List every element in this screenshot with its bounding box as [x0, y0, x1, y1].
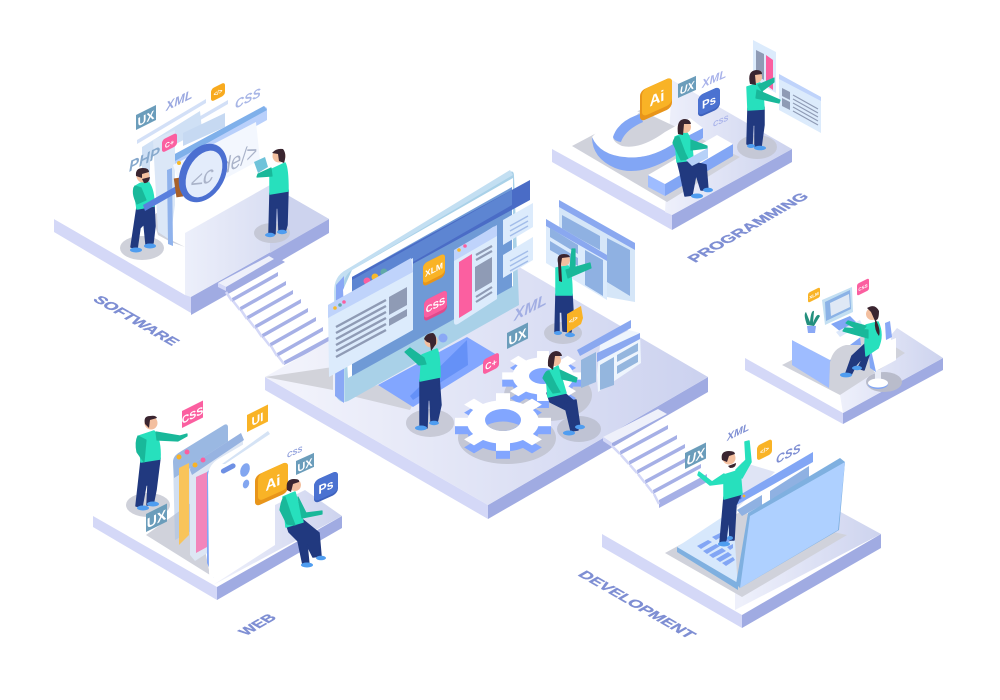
- tag: UX web: UX: [147, 508, 166, 532]
- tag: UX development: UX: [686, 445, 705, 469]
- tile: Ps web: [314, 470, 338, 504]
- text: code label: <code/>: [190, 137, 257, 197]
- tag: code orange software: </>: [214, 87, 223, 99]
- label: web: WEB: [236, 612, 281, 638]
- label: software: SOFTWARE: [89, 294, 182, 348]
- icon: plant: [805, 311, 820, 333]
- panel: desk platform: [745, 325, 943, 424]
- tag: C+ centre: [483, 352, 499, 375]
- tag: UI orange web: UI: [252, 409, 263, 429]
- tag: UX web small: [296, 453, 314, 476]
- icon: magnifying glass: <c: [190, 160, 214, 197]
- stairs: software to centre: [218, 256, 330, 365]
- stairs: centre to development: [603, 409, 707, 508]
- person: woman seated on gear: [543, 351, 601, 442]
- text: CSS web: CSS: [287, 444, 303, 460]
- person: man with arm out: [126, 416, 187, 517]
- icon: magnifying glass: [143, 135, 237, 211]
- icon: laptop: [677, 452, 845, 590]
- person: man at monitor: [405, 333, 454, 437]
- text: PHP software: PHP: [129, 144, 160, 176]
- person: woman with ponytail at windows: </>: [569, 315, 578, 326]
- chair and shadow: desk: [866, 321, 902, 392]
- panel: web platform: [93, 490, 342, 600]
- tag: C+ centre: C+: [485, 357, 497, 373]
- tile: Ai programming: [640, 77, 672, 122]
- text: XML software: XML: [165, 87, 192, 114]
- panel: software floating code window: [137, 99, 267, 246]
- panel: software platform: [54, 160, 329, 315]
- tile: CSS pink: CSS: [426, 296, 446, 316]
- panel: development platform: [602, 462, 881, 628]
- label: development: DEVELOPMENT: [574, 569, 699, 641]
- windows: floating pair near seated woman: [577, 320, 641, 392]
- tag: orange code development: </>: [760, 445, 769, 456]
- tile: Ai web: Ai: [265, 472, 281, 495]
- window: left panel on monitor: [328, 258, 413, 377]
- icon: back gear: [502, 351, 592, 421]
- tag: orange code development: [757, 438, 772, 461]
- panel: central platform: [265, 250, 708, 519]
- person: woman with ponytail at windows: [544, 249, 591, 344]
- tile: XLM orange: XLM: [425, 260, 443, 279]
- bench: programming: [648, 135, 733, 196]
- window: tall programming window: [753, 40, 776, 93]
- text: XML development: XML: [726, 421, 749, 444]
- shape: blue U ramp: [592, 108, 703, 171]
- windows: stacked web panels: [173, 424, 244, 561]
- person: woman at desk: [840, 306, 881, 377]
- windows: small notes beside monitor: [503, 181, 533, 278]
- tag: UX centre: UX: [508, 325, 527, 349]
- tag: CSS pink web: CSS: [182, 405, 203, 427]
- window: wide programming window: [779, 74, 821, 133]
- windows: large pair behind woman: [546, 200, 635, 302]
- person: man seated at web panel: [280, 479, 326, 568]
- tag: C+ pink software: C+: [165, 137, 175, 150]
- person: man with raised arms: [698, 441, 751, 546]
- tile: Ps programming: Ps: [702, 92, 716, 112]
- person: woman standing at windows: [737, 70, 780, 159]
- tag: orange desk: [808, 287, 820, 303]
- text: CSS development: CSS: [776, 440, 801, 467]
- tile: Ps web: Ps: [318, 476, 334, 497]
- text: XML centre: XML: [513, 291, 547, 325]
- tag: C+ pink software: [162, 132, 177, 153]
- panel: programming platform: [552, 80, 792, 230]
- person: man with tablet: [254, 149, 290, 243]
- monitor: desk computer: [822, 287, 862, 337]
- tile: CSS pink: [424, 290, 447, 322]
- tag: pink desk: CSS: [858, 283, 868, 293]
- text: CSS software: CSS: [235, 85, 261, 112]
- tag: UI orange web: [247, 404, 268, 432]
- tag: UX web small: UX: [297, 457, 313, 475]
- person: bearded man with magnifier: [120, 168, 164, 260]
- tag: orange desk: XLM: [809, 291, 819, 301]
- illustration: monitor: [334, 170, 530, 407]
- person: woman seated with laptop: [673, 119, 713, 198]
- tag: UX programming: UX: [680, 79, 695, 98]
- tag: UX programming: [678, 76, 696, 98]
- desk: blue workstation: [792, 312, 870, 389]
- text: XML programming: XML: [701, 67, 726, 91]
- tile: XLM orange: [423, 253, 445, 287]
- tile: Ps programming: [698, 86, 720, 118]
- text: CSS programming: CSS: [713, 113, 729, 129]
- window: centre panel on monitor: [454, 225, 497, 325]
- tile: Ai web: [255, 461, 288, 507]
- icon: front gear: [455, 393, 556, 464]
- label: programming: PROGRAMMING: [685, 191, 813, 265]
- tag: pink desk: [857, 278, 869, 296]
- phone: white panel: [207, 430, 275, 578]
- tag: code orange software: [211, 82, 225, 102]
- tile: Ai programming: Ai: [649, 88, 665, 111]
- tag: UX software: UX: [138, 107, 155, 129]
